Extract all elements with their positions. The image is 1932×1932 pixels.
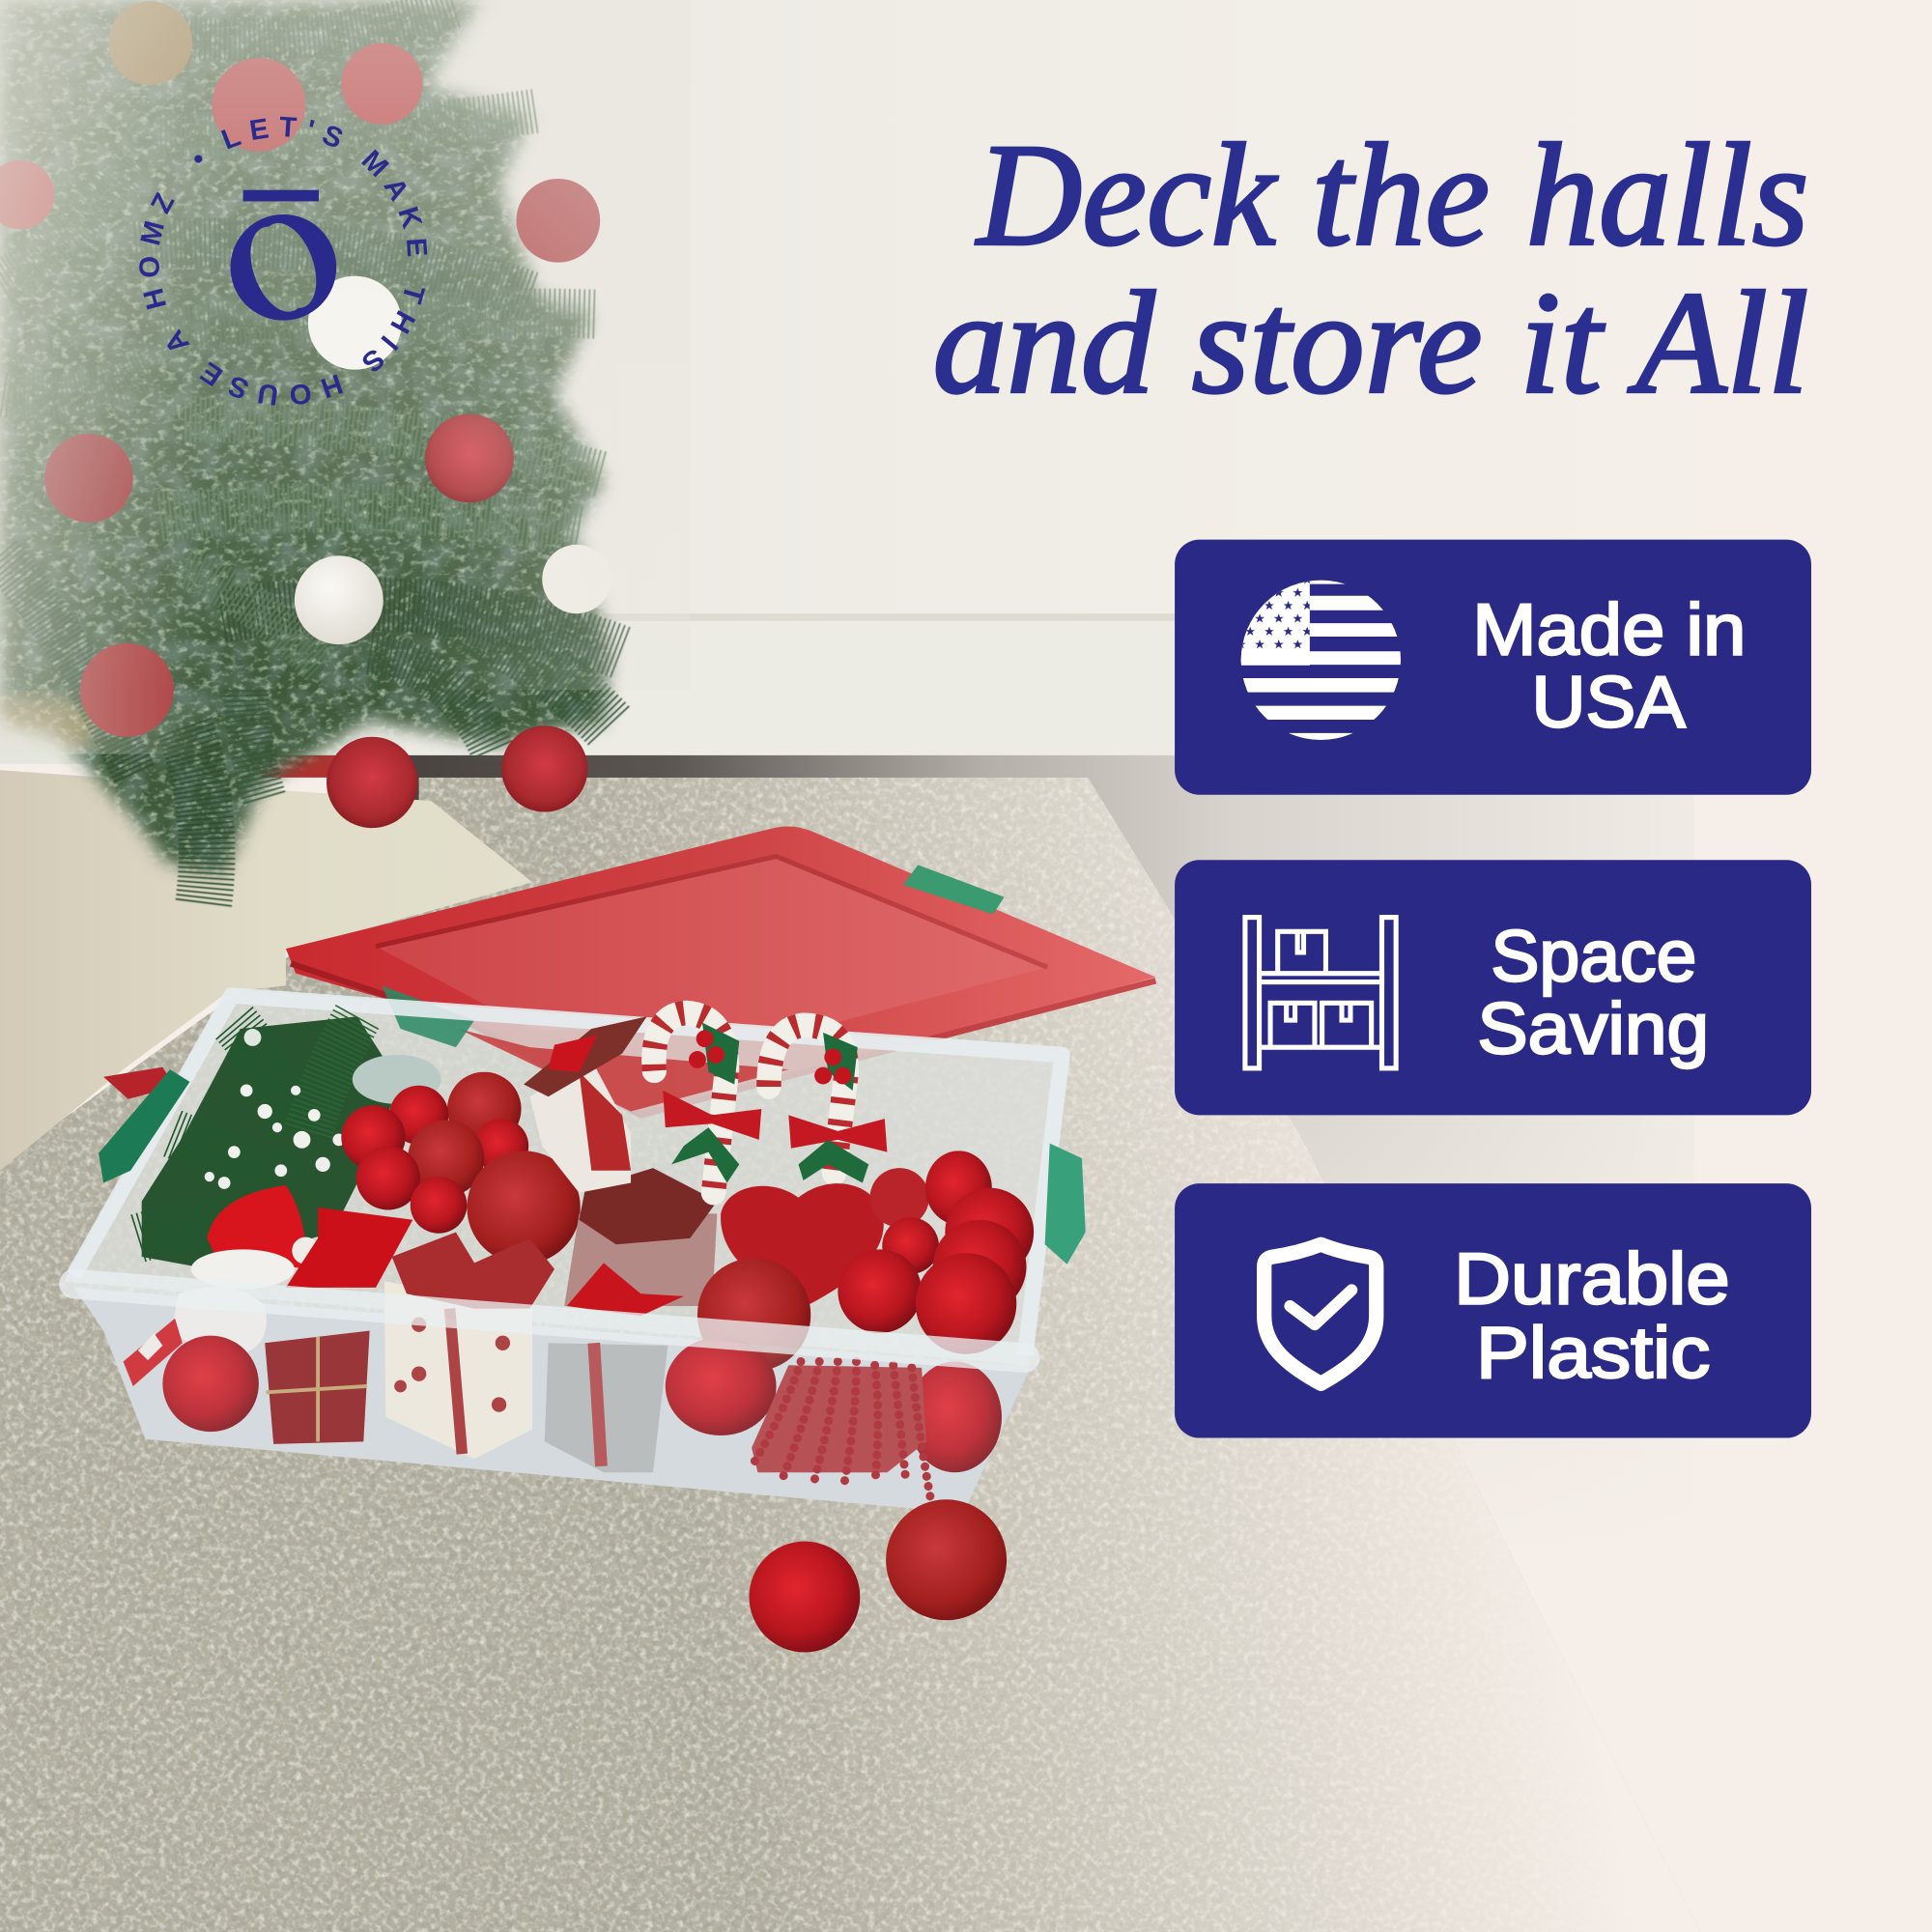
logo ring dot: [194, 155, 202, 163]
green latch near lid: [382, 985, 474, 1047]
box back rim: [74, 996, 1062, 1355]
loose ornaments: [750, 1499, 1007, 1652]
carpet rug: [0, 777, 1725, 1932]
silver gift: [545, 1343, 668, 1472]
red baubles right side: [666, 1151, 1034, 1472]
red foil bow: [567, 1263, 684, 1316]
label: [1477, 915, 1709, 1069]
logo ring text: [159, 137, 408, 385]
box left handle: [99, 1069, 189, 1182]
glitter heart: [721, 1183, 884, 1309]
label: Space: [1491, 915, 1696, 996]
floor strip: [407, 755, 1694, 1569]
ornaments on tree: [0, 1, 611, 828]
label: Durable: [1454, 1237, 1730, 1319]
red lid: [286, 826, 1155, 1115]
panel: space saving: [1175, 860, 1811, 1115]
panel: durable plastic: [1175, 1183, 1811, 1438]
box front wall: [74, 1288, 1030, 1513]
title: [933, 114, 1808, 424]
white polka gift: [384, 1233, 554, 1459]
rug fade: [639, 778, 1700, 1932]
cream tree skirt: [0, 770, 532, 1171]
label: USA: [1531, 662, 1687, 743]
candy cane bows and leaves: [663, 1023, 887, 1182]
red beads: [752, 1361, 930, 1497]
box right handle: [1045, 1144, 1086, 1264]
title: Deck the halls: [975, 114, 1808, 276]
icon: shield with check: [1264, 1244, 1377, 1383]
baseboard: [407, 613, 1202, 755]
box body: [74, 1288, 1030, 1513]
tree branches: [0, 6, 622, 905]
red stocking: [286, 1208, 412, 1288]
pine sprig: [138, 1016, 441, 1269]
red ball and small gift: [162, 1331, 370, 1444]
icon: shelf with boxes: [1245, 918, 1396, 1068]
wrapped candy: [524, 1016, 647, 1193]
gift bow: [392, 1233, 554, 1309]
logo badge: LET'S MAKE THIS HOUSE A HOMZ: [139, 116, 427, 406]
logo bar: [243, 190, 319, 201]
speckled gift: [564, 1168, 717, 1316]
panel: made in USA: [1175, 540, 1811, 795]
label: [1472, 588, 1746, 743]
storage box: [64, 985, 1086, 1513]
logo letter O: [231, 214, 336, 321]
label: Plastic: [1476, 1312, 1710, 1393]
wall panel: [0, 0, 1694, 764]
label: [1454, 1237, 1730, 1393]
lid seen through box: [458, 1029, 788, 1112]
lid green latch: [903, 865, 1005, 914]
red tree base hints: [259, 755, 335, 778]
label: Made in: [1472, 588, 1746, 669]
label: Saving: [1477, 988, 1709, 1069]
tree skirt red trim: [103, 1067, 175, 1099]
box interior: [64, 989, 1069, 1365]
red baubles in box: [341, 1072, 581, 1264]
icon: american flag: [1233, 577, 1405, 741]
box front rim: [74, 1284, 1025, 1358]
christmas tree: [0, 0, 690, 918]
tree haze: [0, 0, 690, 690]
candy canes: [654, 1012, 846, 1193]
title: and store it All: [933, 262, 1808, 424]
santa ornament: [124, 1185, 319, 1386]
